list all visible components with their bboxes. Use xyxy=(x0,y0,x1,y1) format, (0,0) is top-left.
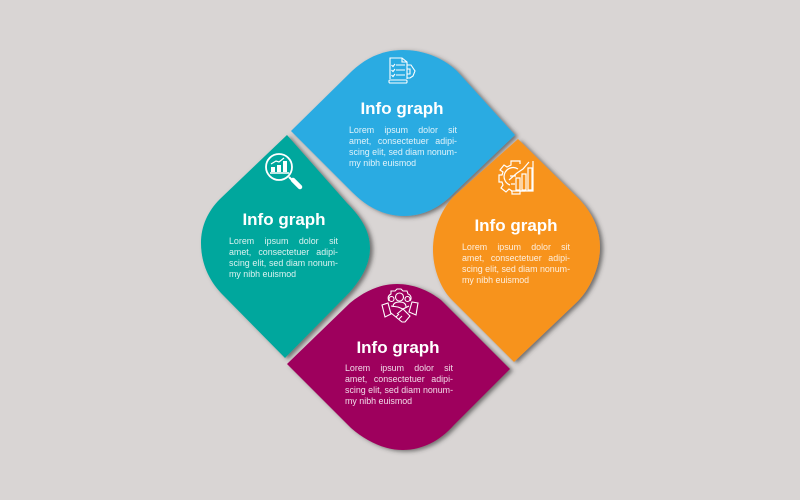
text block: Lorem ipsum dolor sit xyxy=(349,125,457,135)
text block: scing elit, sed diam nonum- xyxy=(229,258,338,268)
text block: scing elit, sed diam nonum- xyxy=(349,147,457,157)
panel: orange right xyxy=(432,138,606,366)
text block: amet, consectetuer adipi- xyxy=(345,374,453,384)
text block: amet, consectetuer adipi- xyxy=(229,247,338,257)
text block xyxy=(345,363,453,406)
text block: amet, consectetuer adipi- xyxy=(349,136,457,146)
heading: Info graph xyxy=(360,99,444,118)
panel: magenta bottom xyxy=(287,282,515,455)
icon: gear with bar chart xyxy=(498,160,534,195)
icon: handshake team gear xyxy=(381,288,419,322)
text block: Lorem ipsum dolor sit xyxy=(345,363,453,373)
text block: Lorem ipsum dolor sit xyxy=(462,242,570,252)
text block: amet, consectetuer adipi- xyxy=(462,253,570,263)
text block xyxy=(349,125,457,168)
panel: teal left xyxy=(200,134,376,362)
text block: my nibh euismod xyxy=(345,396,412,406)
text block: my nibh euismod xyxy=(229,269,296,279)
text block: scing elit, sed diam nonum- xyxy=(462,264,570,274)
heading: Info graph xyxy=(474,216,558,235)
icon: magnifier chart xyxy=(265,153,302,190)
icon: checklist document xyxy=(388,58,416,84)
text block xyxy=(229,236,338,279)
text block: scing elit, sed diam nonum- xyxy=(345,385,453,395)
text block: my nibh euismod xyxy=(349,158,416,168)
heading: Info graph xyxy=(356,338,440,357)
panel: blue top xyxy=(291,48,520,221)
text block xyxy=(462,242,570,285)
text block: my nibh euismod xyxy=(462,275,529,285)
text block: Lorem ipsum dolor sit xyxy=(229,236,338,246)
heading: Info graph xyxy=(242,210,326,229)
